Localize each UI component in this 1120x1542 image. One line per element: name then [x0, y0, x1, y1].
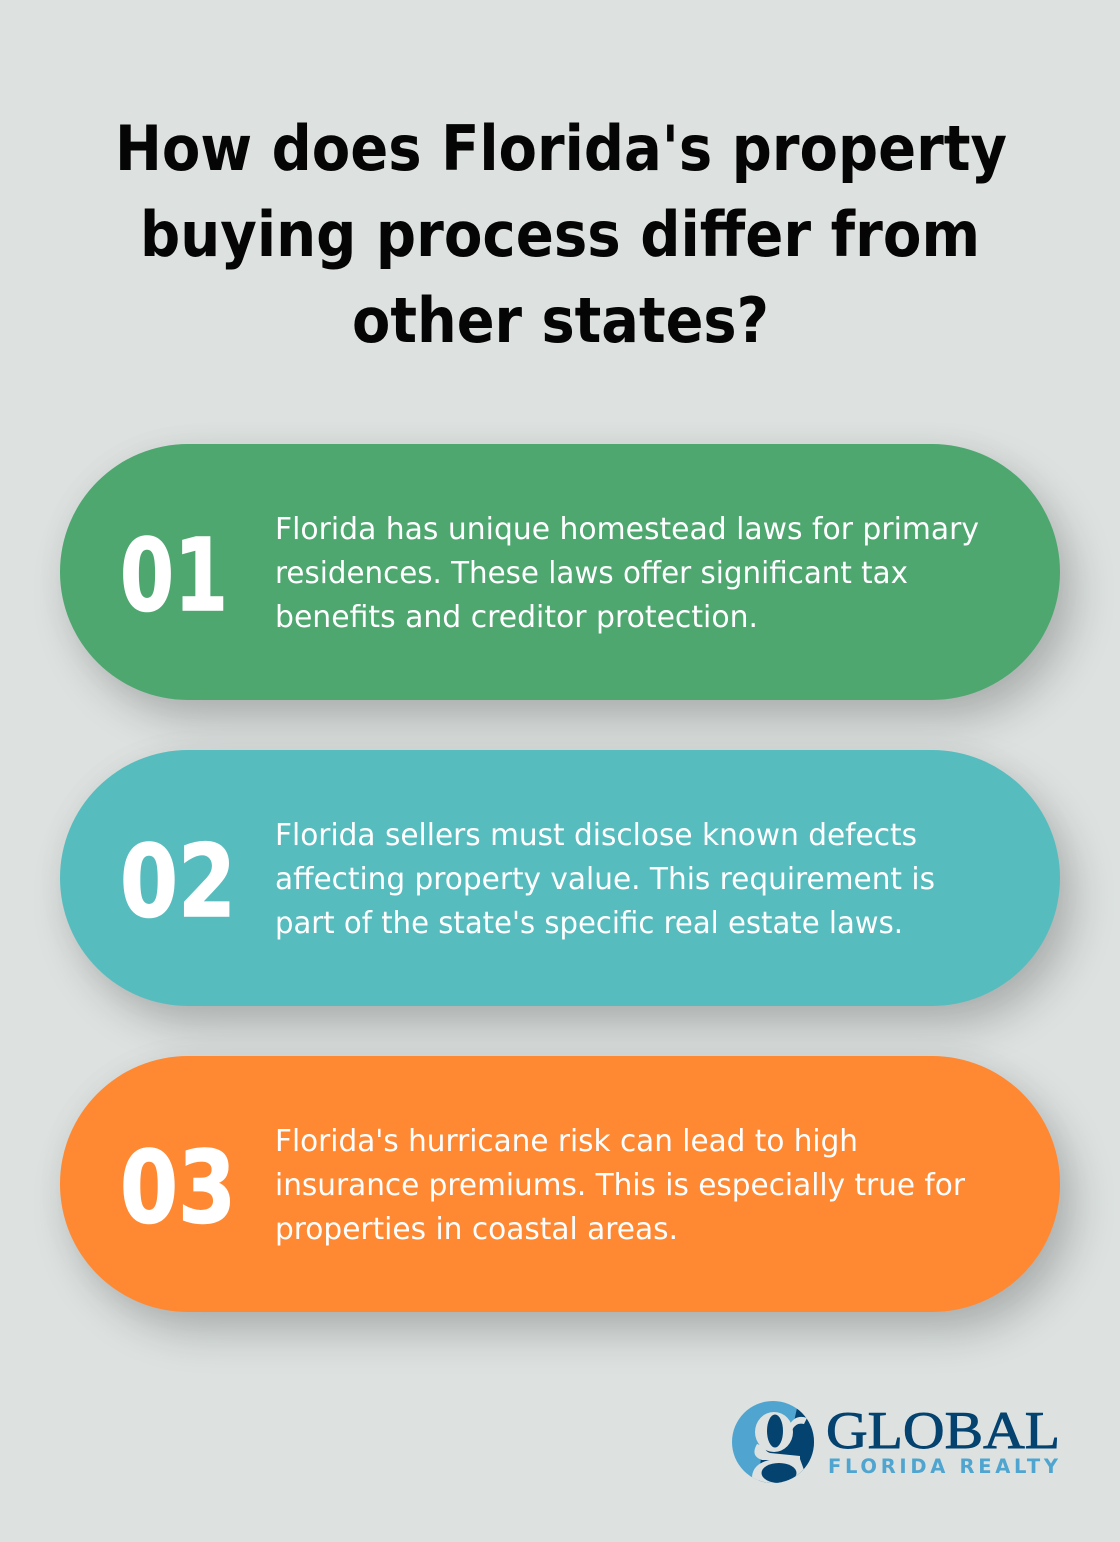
title: How does Florida's property: [115, 112, 1007, 185]
text 02: Florida sellers must disclose known defects: [275, 818, 917, 853]
text 03: properties in coastal areas.: [275, 1212, 678, 1247]
card background: 03 orange: [60, 1056, 1060, 1312]
card background: 02 teal: [60, 750, 1060, 1006]
text 01: residences. These laws offer significant tax: [275, 556, 908, 591]
logo wordmark FLORIDA REALTY: FLORIDA REALTY: [828, 1455, 1059, 1478]
text 02: affecting property value. This requirement is: [275, 862, 935, 897]
card 03 content: [120, 1124, 966, 1247]
text 01: benefits and creditor protection.: [275, 600, 758, 635]
text 03: Florida's hurricane risk can lead to high: [275, 1124, 858, 1159]
number 03: 03: [120, 1129, 236, 1246]
text 01: Florida has unique homestead laws for primary: [275, 512, 979, 547]
number 01: 01: [120, 517, 228, 634]
title: other states?: [352, 284, 769, 357]
text and logo layer: [120, 122, 1058, 1483]
card 01 content: [120, 512, 979, 635]
logo wordmark GLOBAL: GLOBAL: [826, 1402, 1060, 1460]
text 01: [275, 512, 979, 635]
text 02: [275, 818, 935, 941]
text 03: insurance premiums. This is especially true for: [275, 1168, 966, 1203]
number 02: 02: [120, 823, 236, 940]
logo icon: g in circle: [732, 1401, 814, 1483]
card background: 01 green: [60, 444, 1060, 700]
logo: Global Florida Realty: [730, 1400, 1060, 1486]
title: buying process differ from: [140, 198, 980, 271]
card 02 content: [120, 818, 935, 941]
title: [115, 112, 1007, 357]
text 03: [275, 1124, 966, 1247]
text 02: part of the state's specific real estate laws.: [275, 906, 903, 941]
